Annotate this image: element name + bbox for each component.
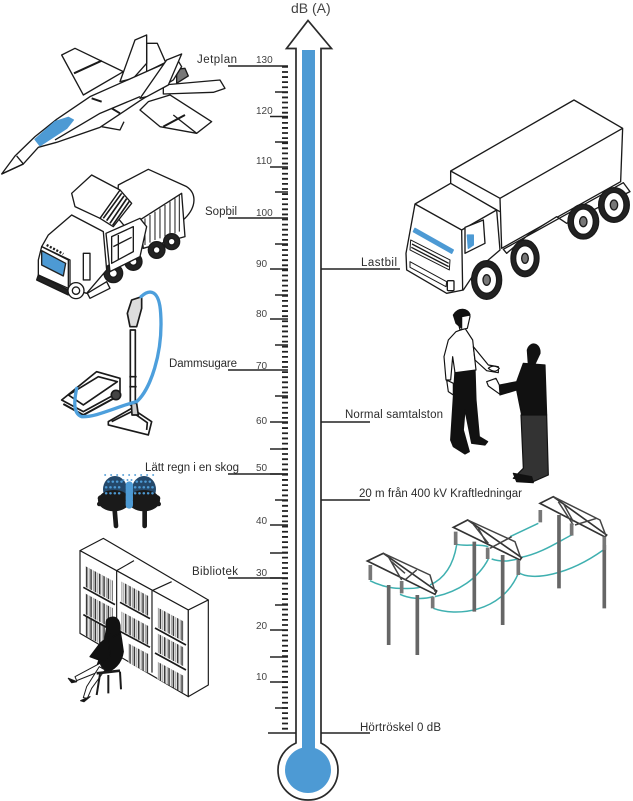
icon: two men talking: [444, 309, 548, 483]
icon: garbage truck: [37, 169, 194, 299]
label: Jetplan: [197, 54, 288, 66]
thermometer scale: 60: [256, 416, 268, 427]
icon: vacuum cleaner: [62, 292, 161, 435]
label: Dammsugare: [169, 358, 288, 370]
thermometer scale: 70: [256, 361, 268, 372]
thermometer scale: 50: [256, 463, 268, 474]
icon: delivery truck: [406, 100, 630, 299]
label: 20 m från 400 kV Kraftledningar: 20 m från 400 kV Kraftledningar: [359, 488, 522, 500]
icon: fighter jet: [2, 35, 225, 174]
thermometer scale: 10: [256, 672, 268, 683]
thermometer scale: 90: [256, 259, 268, 270]
label: Normal samtalston: Normal samtalston: [345, 409, 443, 421]
thermometer scale: 30: [256, 568, 268, 579]
thermometer scale: [256, 55, 288, 733]
icon: trees in light rain: [97, 475, 161, 526]
title: dB (A): [291, 0, 331, 16]
thermometer scale: 100: [256, 208, 273, 219]
label: Bibliotek: Bibliotek: [192, 566, 238, 578]
label: Lastbil: [321, 257, 400, 269]
label: Lätt regn i en skog: Lätt regn i en skog: [145, 462, 239, 474]
thermometer scale: 120: [256, 106, 273, 117]
thermometer scale: 20: [256, 621, 268, 632]
label: Hörtröskel 0 dB: Hörtröskel 0 dB: [360, 722, 441, 734]
icon: bookshelves with seated woman: [68, 538, 208, 702]
thermometer scale: 130: [256, 55, 273, 66]
label: Bibliotek: [192, 566, 288, 578]
label: Jetplan: Jetplan: [197, 54, 237, 66]
thermometer body: [278, 20, 338, 800]
label: Sopbil: [205, 206, 288, 218]
thermometer scale: 80: [256, 309, 268, 320]
thermometer scale: 110: [256, 156, 272, 167]
label: Dammsugare: Dammsugare: [169, 358, 237, 370]
label: Sopbil: Sopbil: [205, 206, 237, 218]
icon: power line pylons: [367, 497, 607, 655]
label: Lastbil: Lastbil: [361, 257, 397, 269]
thermometer scale: 40: [256, 516, 268, 527]
